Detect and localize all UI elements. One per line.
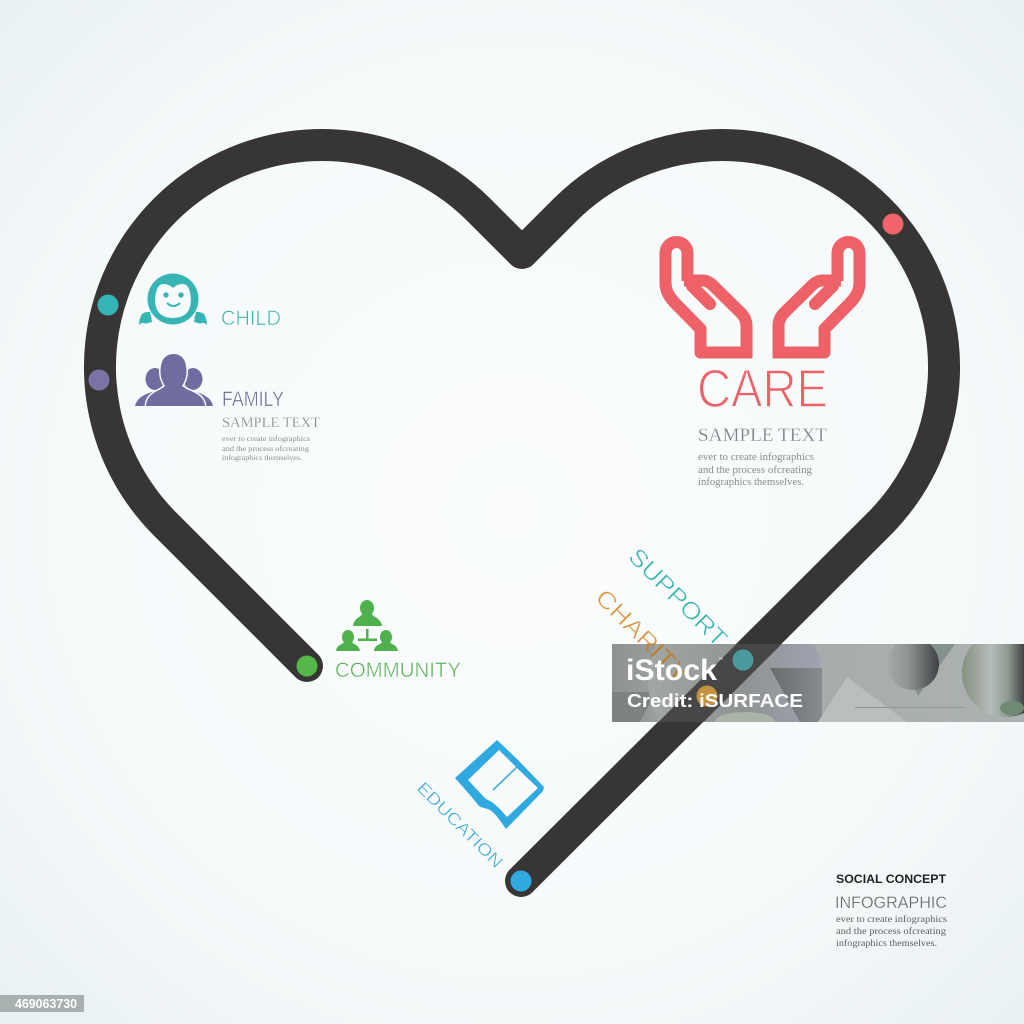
icon: caring hands: [666, 242, 860, 358]
label: infographic: INFOGRAPHIC: [835, 894, 947, 912]
icon: family: [135, 354, 213, 406]
concept description: and the process ofcreating: [836, 926, 946, 937]
image id tag: [0, 995, 84, 1012]
label: education: EDUCATION: [413, 778, 507, 872]
image id tag: 469063730: [15, 997, 77, 1011]
label: social concept: SOCIAL CONCEPT: [836, 872, 947, 886]
icon: community: [336, 600, 398, 651]
concept description: infographics themselves.: [836, 938, 937, 949]
watermark band: CHARITY: [590, 584, 694, 688]
watermark band: Credit: iSURFACE: [627, 691, 803, 711]
care description: and the process ofcreating: [698, 465, 812, 476]
watermark band: iStock: [626, 654, 717, 687]
concept description: ever to create infographics: [836, 914, 947, 925]
label: community: COMMUNITY: [335, 659, 461, 682]
icon: education book: [455, 740, 544, 829]
care description: [698, 452, 814, 488]
care sample text: SAMPLE TEXT: [698, 425, 827, 446]
family description: [222, 434, 310, 462]
label: family: FAMILY: [222, 388, 284, 411]
family description: and the process ofcreating: [222, 444, 309, 453]
label: support: SUPPORT: [623, 543, 733, 653]
label: child: CHILD: [221, 307, 281, 330]
watermark band: [612, 644, 1024, 722]
family description: infographics themselves.: [222, 453, 302, 462]
care description: ever to create infographics: [698, 452, 814, 463]
timeline dots: [88, 214, 904, 892]
label: care: CARE: [697, 359, 828, 419]
label: charity: CHARITY: [590, 584, 694, 688]
care description: infographics themselves.: [698, 477, 804, 488]
watermark band: ™: [718, 657, 723, 663]
family sample text: SAMPLE TEXT: [222, 415, 320, 431]
family description: ever to create infographics: [222, 434, 310, 443]
heart line: [100, 145, 944, 881]
concept description: [836, 914, 947, 949]
icon: child: [139, 274, 207, 325]
